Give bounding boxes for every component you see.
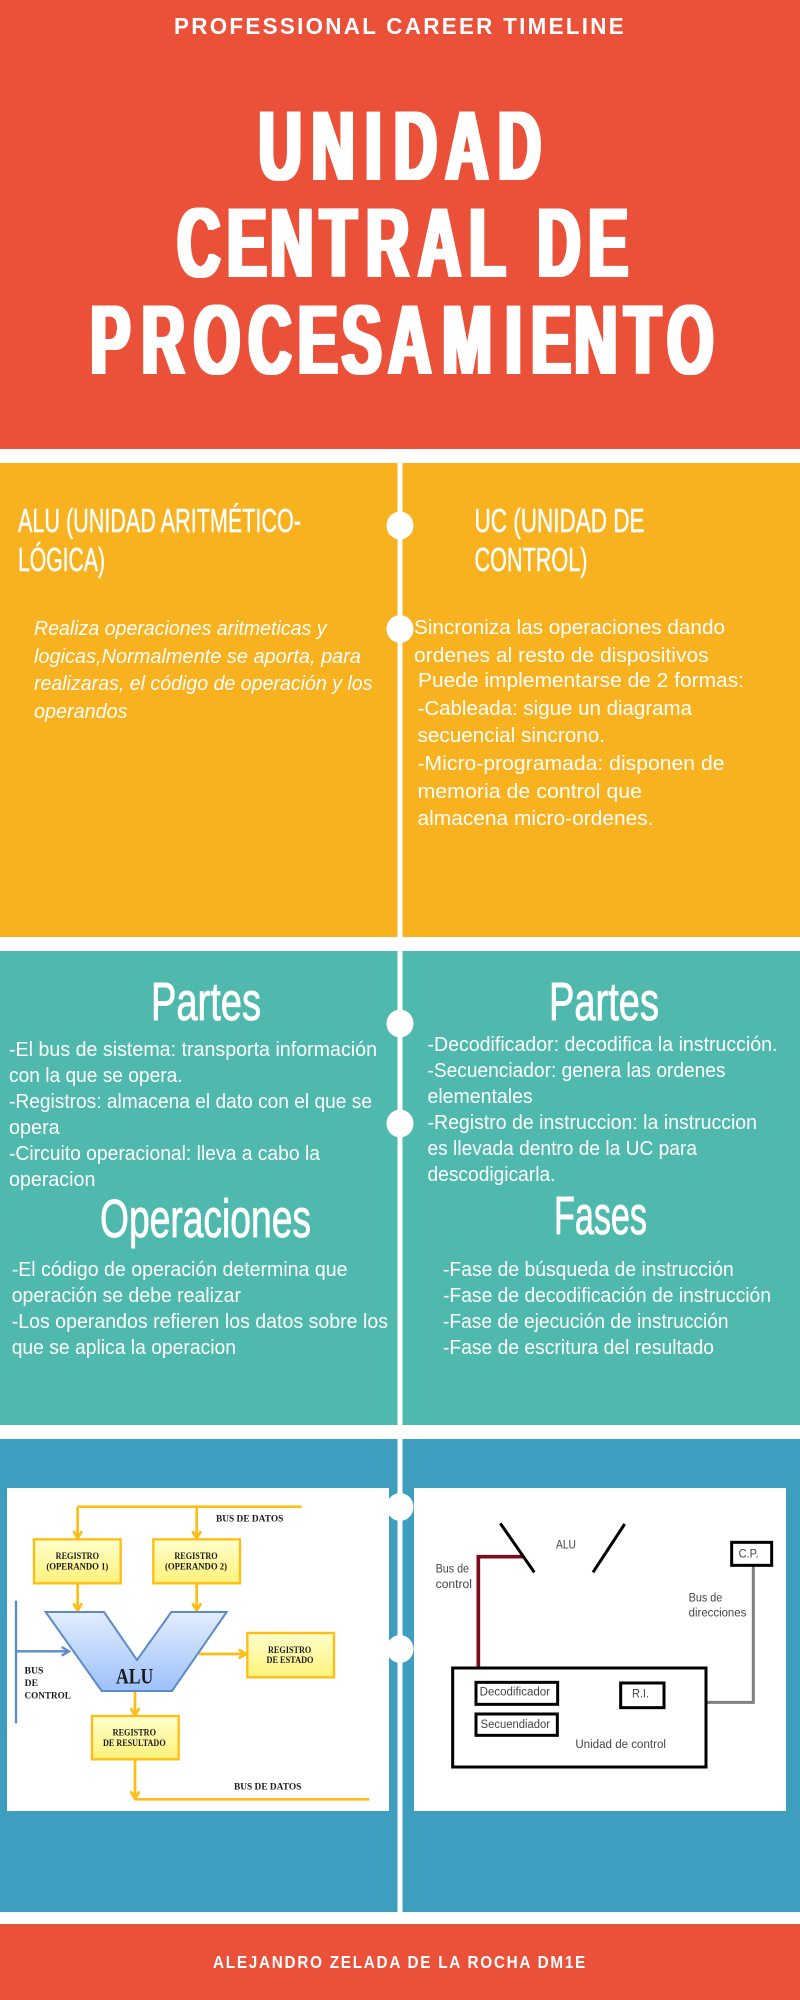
- footer panel: [0, 1924, 800, 2000]
- diagram: control unit: [414, 1488, 786, 1811]
- main title: UNIDAD: [259, 91, 541, 202]
- diagram: control unit: Bus de: [689, 1590, 723, 1604]
- text block: UC description: Puede implementarse de 2 formas:: [418, 669, 744, 692]
- text block: ALU parts: -Registros: almacena el dato con el que se: [9, 1090, 372, 1113]
- main title: CENTRAL DE: [177, 188, 628, 299]
- diagram: ALU: (OPERANDO 2): [165, 1561, 227, 1572]
- diagram: control unit: Unidad de control: [575, 1737, 666, 1751]
- timeline divider with dots: [386, 449, 414, 1924]
- text block: UC parts: es llevada dentro de la UC para: [428, 1137, 698, 1160]
- text block: ALU description: realizaras, el código de operación y los: [34, 672, 372, 695]
- heading: ALU: [18, 502, 301, 578]
- text block: UC parts: -Decodificador: decodifica la instrucción.: [428, 1033, 778, 1056]
- diagram: ALU: DE ESTADO: [266, 1655, 314, 1666]
- text block: UC description: -Micro-programada: disponen de: [418, 752, 724, 775]
- main title: PROCESAMIENTO: [90, 285, 713, 396]
- diagram: ALU: REGISTRO: [56, 1551, 99, 1562]
- diagram: ALU: BUS DE DATOS: [216, 1514, 283, 1525]
- diagram: ALU: REGISTRO: [113, 1728, 156, 1739]
- footer author text: ALEJANDRO ZELADA DE LA ROCHA DM1E: [213, 1952, 587, 1972]
- diagram: control unit: Decodificador: [480, 1685, 550, 1699]
- text block: ALU parts: opera: [9, 1116, 60, 1139]
- text block: UC parts: descodigicarla.: [428, 1163, 556, 1186]
- diagram: control unit: Secuendiador: [481, 1717, 550, 1731]
- text block: UC description: ordenes al resto de dispositivos: [414, 644, 709, 667]
- panel: ALU and UC overview: [0, 463, 800, 937]
- heading: UC: UC (UNIDAD DE: [474, 502, 644, 539]
- heading: UC: [474, 502, 644, 578]
- text block: operations: -El código de operación determina que: [12, 1258, 347, 1281]
- panel: parts, operations and phases: [0, 951, 800, 1425]
- heading: Partes left: Partes: [151, 972, 261, 1032]
- diagram: ALU: [7, 1488, 389, 1811]
- text block: ALU parts: -El bus de sistema: transporta información: [9, 1038, 377, 1061]
- text block: phases: [443, 1258, 771, 1359]
- text block: ALU description: [34, 617, 372, 723]
- main title: [90, 91, 713, 396]
- diagram: control unit: ALU: [556, 1537, 576, 1551]
- text block: operations: que se aplica la operacion: [12, 1336, 236, 1359]
- text block: UC description: -Cableada: sigue un diagrama: [418, 697, 693, 720]
- text block: ALU parts: operacion: [9, 1168, 95, 1191]
- heading: Partes right: Partes: [549, 972, 659, 1032]
- heading: UC: CONTROL): [474, 541, 588, 578]
- diagram: control unit: control: [436, 1577, 472, 1591]
- text block: UC description: secuencial sincrono.: [418, 724, 605, 747]
- diagram: control unit: direcciones: [689, 1606, 746, 1620]
- diagram: ALU: DE: [25, 1678, 38, 1689]
- text block: phases: -Fase de decodificación de instrucción: [443, 1284, 771, 1307]
- diagram: ALU: REGISTRO: [268, 1645, 312, 1656]
- heading: ALU: ALU (UNIDAD ARITMÉTICO-: [18, 502, 301, 539]
- text block: ALU description: operandos: [34, 700, 128, 723]
- diagram: ALU: BUS: [24, 1665, 43, 1676]
- text block: ALU parts: con la que se opera.: [9, 1064, 183, 1087]
- diagram: control unit: C.P.: [739, 1546, 759, 1560]
- diagram: ALU: BUS DE DATOS: [234, 1781, 301, 1792]
- text block: ALU parts: [9, 1038, 377, 1191]
- text block: UC parts: elementales: [428, 1085, 533, 1108]
- text block: UC description: memoria de control que: [418, 780, 642, 803]
- text block: phases: -Fase de búsqueda de instrucción: [443, 1258, 734, 1281]
- text block: UC description: [414, 616, 744, 830]
- text block: ALU parts: -Circuito operacional: lleva a cabo la: [9, 1142, 321, 1165]
- diagram: control unit: R.I.: [632, 1687, 649, 1701]
- text block: operations: -Los operandos refieren los datos sobre los: [12, 1310, 388, 1333]
- diagram: ALU: (OPERANDO 1): [46, 1561, 108, 1572]
- text block: phases: -Fase de escritura del resultado: [443, 1336, 714, 1359]
- heading: Operaciones: Operaciones: [100, 1189, 311, 1249]
- diagram: ALU: CONTROL: [24, 1690, 71, 1701]
- text block: UC parts: -Registro de instruccion: la instruccion: [428, 1111, 757, 1134]
- text block: phases: -Fase de ejecución de instrucción: [443, 1310, 729, 1333]
- text block: operations: [12, 1258, 388, 1359]
- text block: UC parts: -Secuenciador: genera las ordenes: [428, 1059, 726, 1082]
- diagram: ALU: REGISTRO: [174, 1551, 218, 1562]
- diagram: ALU: DE RESULTADO: [103, 1738, 166, 1749]
- text block: ALU description: Realiza operaciones aritmeticas y: [34, 617, 328, 640]
- panel: diagrams: [0, 1439, 800, 1912]
- text block: UC description: almacena micro-ordenes.: [418, 807, 654, 830]
- diagram: control unit: Bus de: [436, 1562, 469, 1576]
- diagram: ALU: ALU: [116, 1663, 153, 1688]
- text block: UC description: Sincroniza las operaciones dando: [414, 616, 725, 639]
- heading: Fases: Fases: [554, 1186, 647, 1246]
- heading: ALU: LÓGICA): [18, 541, 105, 578]
- text block: ALU description: logicas,Normalmente se aporta, para: [34, 645, 361, 668]
- text block: operations: operación se debe realizar: [12, 1284, 241, 1307]
- header panel: [0, 0, 800, 449]
- text block: UC parts: [428, 1033, 778, 1186]
- subtitle: professional career timeline: PROFESSIONAL CAREER TIMELINE: [174, 13, 626, 39]
